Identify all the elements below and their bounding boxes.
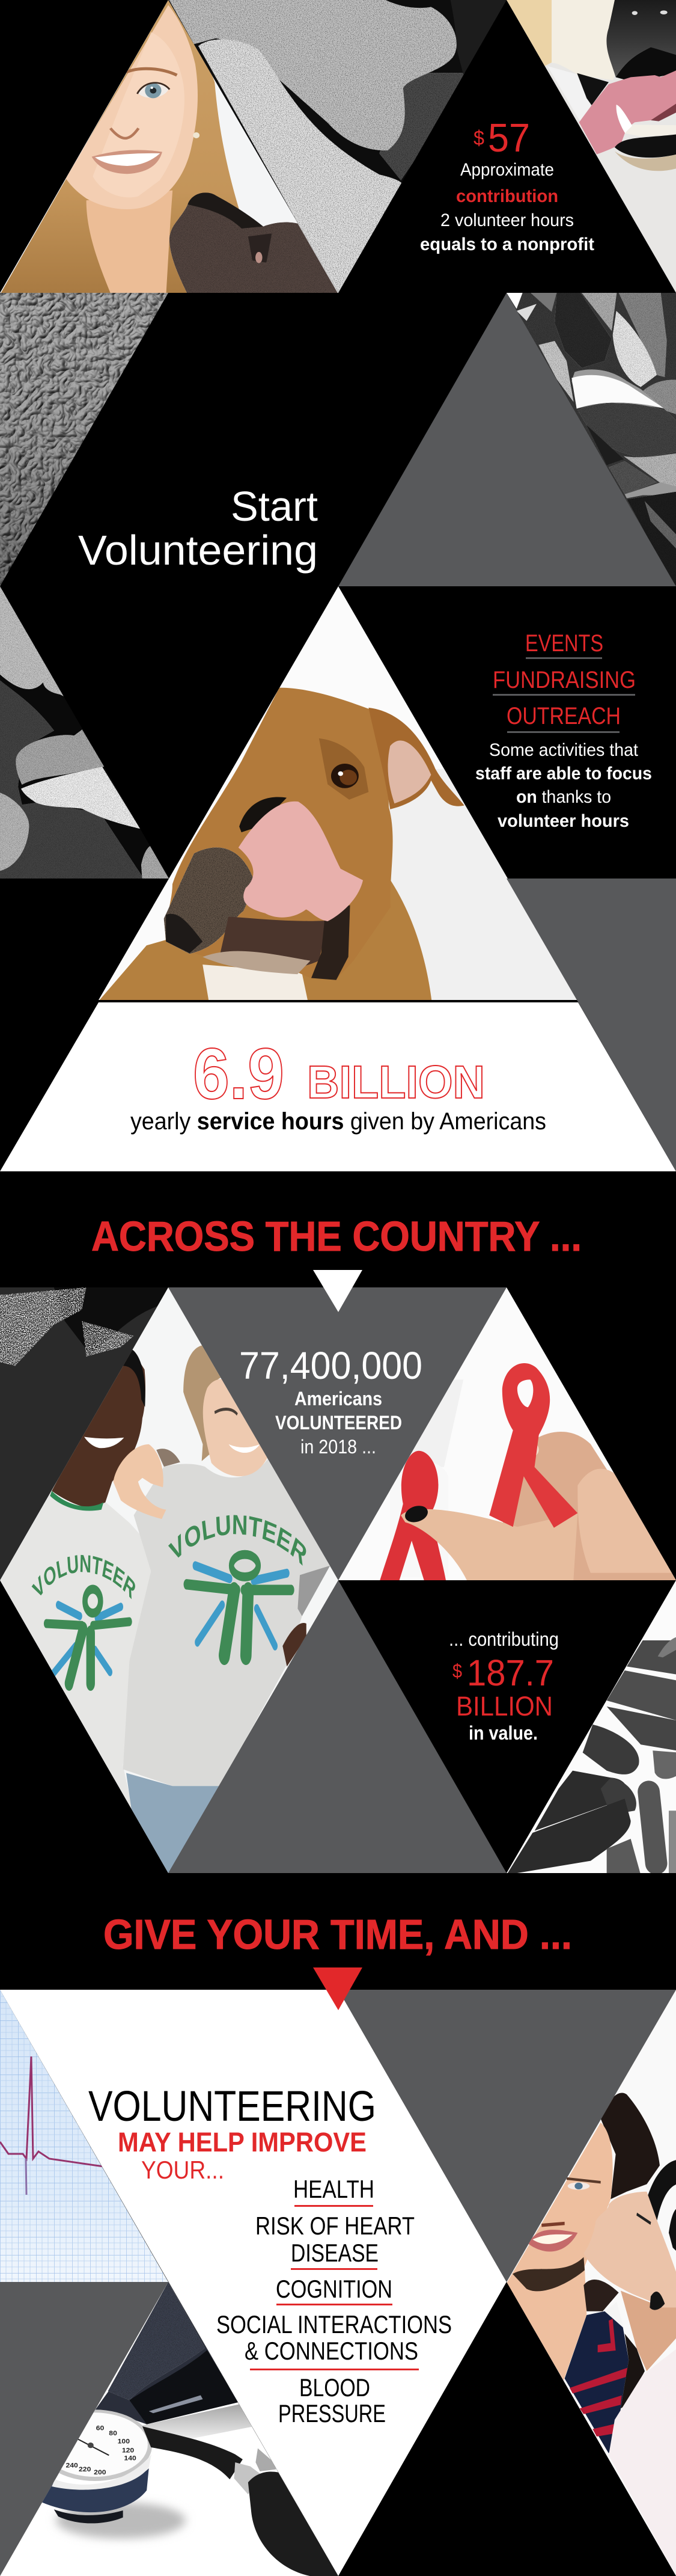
activity: outreach: OUTREACH bbox=[507, 703, 621, 729]
logo on man's shirt: VOLUNTEER bbox=[31, 1555, 135, 1599]
stat: 6.9 billion bbox=[193, 1034, 485, 1114]
nose bbox=[111, 128, 138, 138]
text: contributing 187.7 billion bbox=[449, 1628, 559, 1744]
panel: gray right triangle bbox=[507, 879, 676, 1171]
man's shirt bbox=[565, 2311, 629, 2453]
sleeve and man's hand bbox=[297, 1566, 330, 1616]
panel: white diamond bbox=[0, 1990, 507, 2576]
white fur bbox=[552, 0, 629, 80]
item: blood pressure: BLOOD bbox=[299, 2373, 370, 2402]
panel: ribbon photo bbox=[336, 1283, 676, 1587]
nose and mouth bbox=[541, 2224, 565, 2225]
mouth bbox=[616, 47, 676, 80]
logo on man's shirt bbox=[31, 1555, 135, 1691]
head bbox=[165, 688, 393, 979]
gauge: 140 bbox=[124, 2455, 136, 2462]
text: yearly service hours: yearly service hours given by Americans bbox=[130, 1108, 546, 1135]
earring bbox=[193, 132, 199, 138]
panel: dog biscuits photo bbox=[164, 0, 509, 295]
text: volunteering may help improve bbox=[88, 2083, 376, 2184]
gauge base bbox=[42, 2468, 149, 2512]
panel: ecg photo bbox=[0, 1990, 171, 2284]
panel: leather texture bbox=[0, 293, 174, 587]
heading: give your time: GIVE YOUR TIME, AND ... bbox=[103, 1911, 572, 1958]
left ribbon bbox=[379, 1451, 446, 1582]
gauge: 80 bbox=[109, 2429, 117, 2437]
woman's face bbox=[583, 2192, 676, 2308]
text: volunteering may help improve: YOUR... bbox=[141, 2156, 224, 2184]
text: 77,400,000 americans: in 2018 ... bbox=[300, 1436, 376, 1458]
item: heart disease: DISEASE bbox=[291, 2239, 379, 2267]
panel: gray inverted triangle bbox=[168, 1287, 507, 1580]
teeth bbox=[617, 105, 634, 133]
panel: bulldog photo bbox=[86, 577, 595, 1003]
item: social: & CONNECTIONS bbox=[245, 2337, 418, 2365]
text: contributing 187.7 billion: ... contributing bbox=[449, 1628, 559, 1650]
eye bbox=[331, 764, 359, 788]
hands bbox=[474, 1432, 676, 1582]
panel: gray upright triangle bbox=[168, 1580, 507, 1873]
text: approximate contribution: contribution bbox=[456, 186, 558, 206]
stat: 6.9 billion: BILLION bbox=[307, 1056, 485, 1108]
panel: rope photo bbox=[507, 293, 676, 587]
text: contributing 187.7 billion: BILLION bbox=[456, 1691, 553, 1722]
panel: volunteers photo bbox=[0, 1287, 338, 1873]
woman hair bbox=[183, 1345, 222, 1461]
heading: start volunteering: Start bbox=[231, 483, 318, 530]
mouth bbox=[220, 916, 327, 969]
muzzle bbox=[164, 847, 255, 954]
gauge: 220 bbox=[79, 2465, 91, 2473]
woman's hair bbox=[647, 2160, 676, 2222]
valve bbox=[234, 2462, 261, 2494]
panel: white triangle stat bbox=[0, 1002, 676, 1171]
item: social bbox=[216, 2310, 452, 2370]
activity: fundraising: FUNDRAISING bbox=[493, 667, 636, 693]
yellow fur bbox=[507, 0, 552, 66]
dark dog bbox=[169, 192, 339, 295]
text: contributing 187.7 billion: in value. bbox=[469, 1722, 538, 1744]
text: volunteering may help improve: VOLUNTEERING bbox=[88, 2083, 376, 2130]
panel: blood pressure photo bbox=[0, 2282, 339, 2576]
item: social: SOCIAL INTERACTIONS bbox=[216, 2310, 452, 2338]
text: approximate contribution: 2 volunteer hours bbox=[440, 210, 574, 230]
text: 77,400,000 americans: 77,400,000 bbox=[239, 1344, 422, 1387]
panel: fact black triangle text bbox=[420, 115, 594, 254]
panel: gray upper triangle bbox=[338, 1990, 676, 2282]
description bbox=[475, 740, 652, 831]
tongue bbox=[579, 70, 676, 155]
brow and eye bbox=[126, 69, 177, 75]
panel: black lower triangle bbox=[338, 2282, 676, 2576]
jeans bbox=[126, 1773, 220, 1874]
man's hair bbox=[601, 2093, 660, 2199]
description: staff are able to focus bbox=[475, 764, 652, 784]
panel: white dog photo bbox=[507, 0, 676, 295]
item: blood pressure bbox=[278, 2373, 386, 2427]
beard bbox=[513, 2257, 585, 2291]
man shirt bbox=[0, 1493, 152, 1811]
item: heart disease: RISK OF HEART bbox=[255, 2212, 415, 2240]
face bbox=[65, 5, 198, 209]
panel: gray triangle bbox=[338, 293, 676, 586]
hair bbox=[1, 0, 239, 293]
stat: 6.9 billion: 6.9 bbox=[193, 1034, 284, 1114]
heading: start volunteering: Volunteering bbox=[78, 527, 318, 574]
nose and muzzle bbox=[606, 0, 676, 77]
background head bbox=[156, 1449, 180, 1467]
text: approximate contribution: Approximate bbox=[460, 160, 554, 180]
gauge: 100 bbox=[118, 2438, 130, 2445]
text: activities list bbox=[475, 630, 652, 831]
text: volunteering may help improve: MAY HELP IMPROVE bbox=[118, 2127, 367, 2157]
gauge: 240 bbox=[65, 2462, 78, 2469]
divider under bulldog bbox=[99, 1000, 578, 1002]
neck bbox=[87, 191, 172, 295]
panel: grunge dark texture bbox=[0, 1287, 171, 1583]
panel: couple photo bbox=[507, 1990, 676, 2576]
man's face and neck bbox=[507, 2123, 613, 2381]
woman's lower hair bbox=[621, 2334, 645, 2408]
activity: events: EVENTS bbox=[525, 630, 603, 657]
bulb bbox=[248, 2471, 339, 2576]
cuff bbox=[95, 2282, 239, 2424]
text: 77,400,000 americans: Americans bbox=[294, 1388, 382, 1409]
table shadow bbox=[138, 2404, 255, 2443]
panel: hands silhouette photo bbox=[507, 1580, 676, 1875]
description: volunteer hours bbox=[498, 811, 629, 831]
chin bbox=[615, 152, 676, 171]
heading: start volunteering bbox=[78, 483, 318, 574]
stat: $57: 57 bbox=[488, 115, 530, 161]
woman shirt bbox=[123, 1459, 330, 1786]
woman's hand bbox=[113, 1444, 166, 1519]
woman face bbox=[203, 1379, 267, 1476]
smile bbox=[92, 150, 162, 174]
lower lip bbox=[615, 134, 676, 158]
panel: woman and dog photo bbox=[0, 0, 339, 295]
gauge: 60 bbox=[96, 2424, 105, 2432]
panel: gray left triangle bbox=[0, 2282, 168, 2576]
description: on thanks to bbox=[516, 787, 611, 807]
item: cognition: COGNITION bbox=[276, 2275, 392, 2303]
arrow: red down bbox=[313, 1967, 362, 2010]
item: health: HEALTH bbox=[293, 2175, 374, 2203]
eye and brow bbox=[568, 2182, 589, 2190]
man head bbox=[52, 1349, 145, 1509]
logo on woman's shirt: VOLUNTEER bbox=[168, 1515, 306, 1566]
text: contributing 187.7 billion: $ bbox=[452, 1660, 462, 1682]
text: approximate contribution bbox=[420, 160, 594, 254]
item: heart disease bbox=[255, 2212, 415, 2270]
tube bbox=[142, 2426, 243, 2479]
woman's top bbox=[609, 2349, 676, 2576]
big ribbon bbox=[489, 1363, 577, 1528]
panel: biscuits lower photo bbox=[0, 586, 172, 879]
stat: $57: $ bbox=[474, 127, 484, 150]
text: approximate contribution: equals to a nonprofit bbox=[420, 235, 594, 254]
text: 77,400,000 americans: VOLUNTEERED bbox=[275, 1412, 402, 1434]
tongue bbox=[239, 802, 363, 921]
list: health benefits bbox=[216, 2175, 452, 2427]
woman's neck bbox=[621, 2291, 676, 2371]
gauge: 120 bbox=[122, 2447, 135, 2454]
arrow: white down bbox=[313, 1270, 362, 1312]
gauge: 200 bbox=[94, 2468, 106, 2476]
body bbox=[97, 876, 432, 1003]
ear bbox=[368, 708, 464, 809]
item: blood pressure: PRESSURE bbox=[278, 2399, 386, 2427]
heading: across the country: ACROSS THE COUNTRY ... bbox=[91, 1213, 582, 1260]
man's lower hair bbox=[583, 2280, 619, 2311]
text: contributing 187.7 billion: 187.7 bbox=[467, 1652, 554, 1693]
description: Some activities that bbox=[489, 740, 639, 760]
text: 77,400,000 americans bbox=[239, 1344, 422, 1458]
gauge bbox=[38, 2409, 152, 2490]
logo on woman's shirt bbox=[168, 1515, 306, 1665]
